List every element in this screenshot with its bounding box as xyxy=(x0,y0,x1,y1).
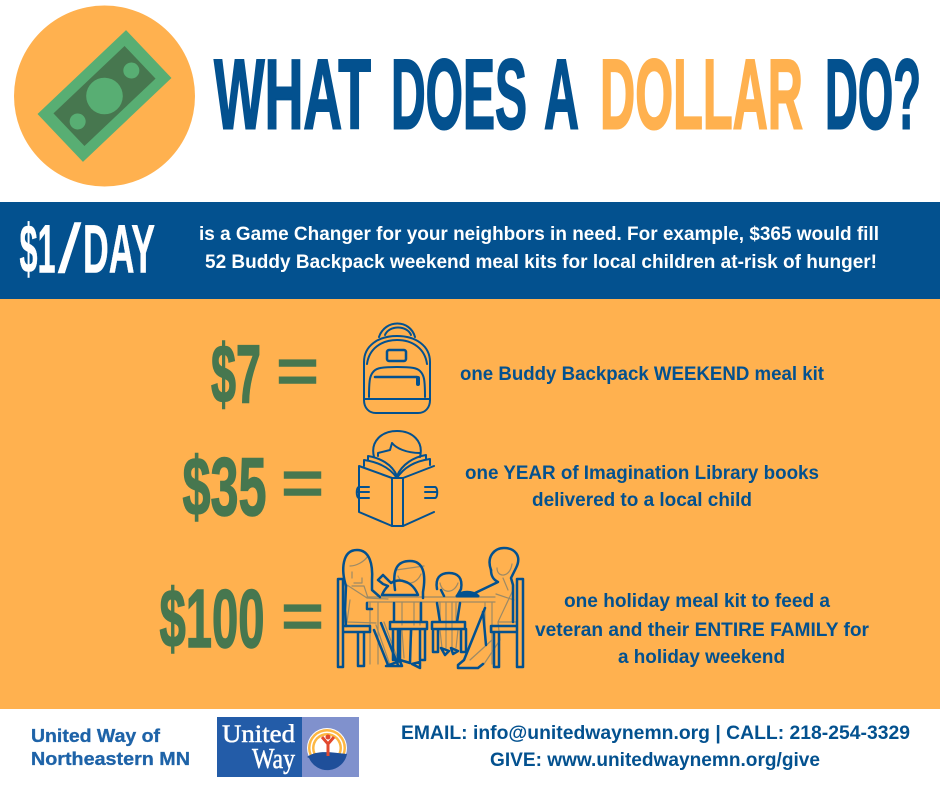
title: DOES xyxy=(391,38,527,150)
banner text xyxy=(199,224,879,273)
icon: dollar bill in circle xyxy=(14,6,195,186)
amount: $35: $35 xyxy=(182,440,266,533)
label: $100: one holiday meal kit to feed a xyxy=(564,590,830,612)
amount: $7: = xyxy=(276,335,319,406)
footer org name: Northeastern MN xyxy=(31,749,190,769)
logo: United Way: Way xyxy=(252,744,295,775)
title: A xyxy=(544,38,579,150)
banner heading: DAY xyxy=(83,210,155,288)
label: $35: one YEAR of Imagination Library books xyxy=(465,462,819,484)
label: $7: one Buddy Backpack WEEKEND meal kit xyxy=(460,363,824,385)
banner text: is a Game Changer for your neighbors in need. For example, $365 would fill xyxy=(199,224,879,245)
panel: orange giving levels xyxy=(0,299,940,709)
shoes xyxy=(386,661,420,668)
amount: $100: = xyxy=(281,580,324,651)
title xyxy=(214,38,921,150)
father xyxy=(490,548,518,622)
footer org name: United Way of xyxy=(31,726,161,746)
thick silhouette lines xyxy=(338,548,523,668)
left chair xyxy=(338,579,370,667)
footer contact: EMAIL: info@unitedwaynemn.org | CALL: 218-254-3329 xyxy=(401,723,910,744)
banner heading: / xyxy=(58,210,82,288)
footer contact xyxy=(401,723,910,771)
banner heading: $1 xyxy=(20,210,56,288)
icon: family at dinner table xyxy=(338,548,523,668)
footer contact: GIVE: www.unitedwaynemn.org/give xyxy=(490,750,820,771)
label: $35: delivered to a local child xyxy=(532,489,752,511)
pie xyxy=(457,592,478,596)
logo: United Way: United xyxy=(222,721,296,748)
footer org name xyxy=(31,726,190,769)
icon: child reading book xyxy=(357,431,437,526)
logo: United Way xyxy=(217,717,359,777)
icon: backpack xyxy=(364,324,430,413)
label: $100 xyxy=(535,590,869,668)
turkey xyxy=(378,575,418,595)
boy xyxy=(394,561,424,598)
amount: $100: $100 xyxy=(160,572,264,665)
banner: $1/day xyxy=(0,202,940,299)
mother xyxy=(343,550,380,597)
label: $100: veteran and their ENTIRE FAMILY for xyxy=(535,619,869,641)
girl xyxy=(437,573,461,596)
label: $35 xyxy=(465,462,819,511)
label: $100: a holiday weekend xyxy=(618,646,785,668)
amount: $35: = xyxy=(281,447,324,518)
banner text: 52 Buddy Backpack weekend meal kits for local children at-risk of hunger! xyxy=(205,252,877,273)
right chair xyxy=(491,579,523,667)
amount: $7: $7 xyxy=(211,328,261,420)
thin interior lines xyxy=(347,556,516,665)
title: WHAT xyxy=(214,38,371,150)
